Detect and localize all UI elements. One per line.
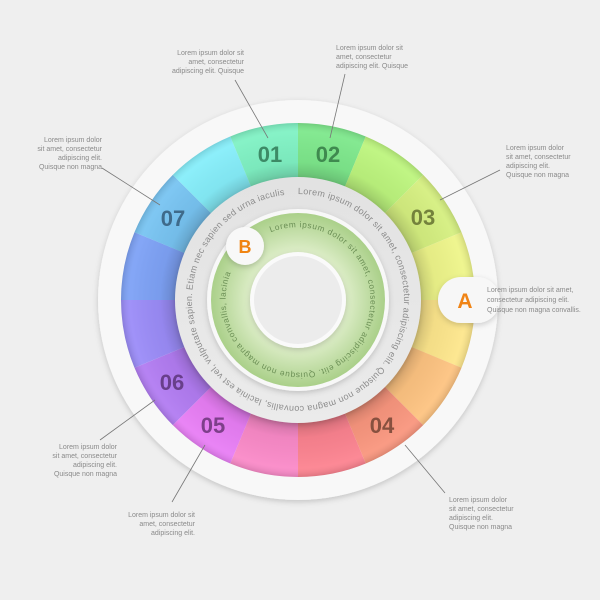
callout 05: amet, consectetur <box>139 521 196 528</box>
colored segment ring <box>109 111 487 489</box>
badge A <box>438 277 500 323</box>
callout 01: adipiscing elit. Quisque <box>172 68 244 75</box>
badge B <box>226 227 264 265</box>
segment numbers: 05 <box>201 413 225 438</box>
center circle <box>252 254 344 346</box>
white separator ring <box>207 209 389 391</box>
callout 02: Lorem ipsum dolor sit <box>336 45 403 52</box>
segment numbers: 02 <box>316 142 340 167</box>
outer white ring <box>98 100 498 500</box>
callout 05: Lorem ipsum dolor sit <box>128 512 195 519</box>
green text ring: Lorem ipsum dolor sit amet, consectetur adipiscing elit. Quisque non magna convallis, lacinia <box>220 221 375 379</box>
callout 02: amet, consectetur <box>336 54 392 61</box>
callout 07: Lorem ipsum dolor <box>44 137 103 144</box>
callout 03: sit amet, consectetur <box>506 154 571 161</box>
callout 04: Lorem ipsum dolor <box>449 497 508 504</box>
callout 06: sit amet, consectetur <box>52 453 118 460</box>
segment numbers <box>160 142 435 438</box>
badge B: B <box>238 237 252 257</box>
callout 07: adipiscing elit. <box>58 155 102 162</box>
callout A: consectetur adipiscing elit. <box>487 297 569 304</box>
segment numbers: 01 <box>258 142 282 167</box>
gray text ring: Lorem ipsum dolor sit amet, consectetur adipiscing elit. Quisque non magna convallis, lacinia est vel, vulputate sapien. Etiam nec sapien sed urna iaculis <box>186 188 410 411</box>
callout A: Quisque non magna convallis. <box>487 307 581 314</box>
callout lines <box>100 74 500 502</box>
callout 07: Quisque non magna <box>39 164 102 171</box>
callout 03: Lorem ipsum dolor <box>506 145 565 152</box>
segment numbers: 04 <box>370 413 395 438</box>
callout A: Lorem ipsum dolor sit amet, <box>487 287 573 294</box>
callout 01: amet, consectetur <box>188 59 245 66</box>
callout 03: adipiscing elit. <box>506 163 550 170</box>
callout 06: Quisque non magna <box>54 471 117 478</box>
segment numbers: 06 <box>160 370 184 395</box>
callout 06: adipiscing elit. <box>73 462 117 469</box>
callout 04: adipiscing elit. <box>449 515 493 522</box>
callout 03: Quisque non magna <box>506 172 569 179</box>
callout 01: Lorem ipsum dolor sit <box>177 50 244 57</box>
callout 06: Lorem ipsum dolor <box>59 444 118 451</box>
badge A: A <box>457 290 473 313</box>
callout 02: adipiscing elit. Quisque <box>336 63 408 70</box>
callout 07: sit amet, consectetur <box>37 146 103 153</box>
segment numbers: 07 <box>161 206 185 231</box>
callout 05: adipiscing elit. <box>151 530 195 537</box>
segment numbers: 03 <box>411 205 435 230</box>
callout 04: Quisque non magna <box>449 524 512 531</box>
callout 04: sit amet, consectetur <box>449 506 514 513</box>
